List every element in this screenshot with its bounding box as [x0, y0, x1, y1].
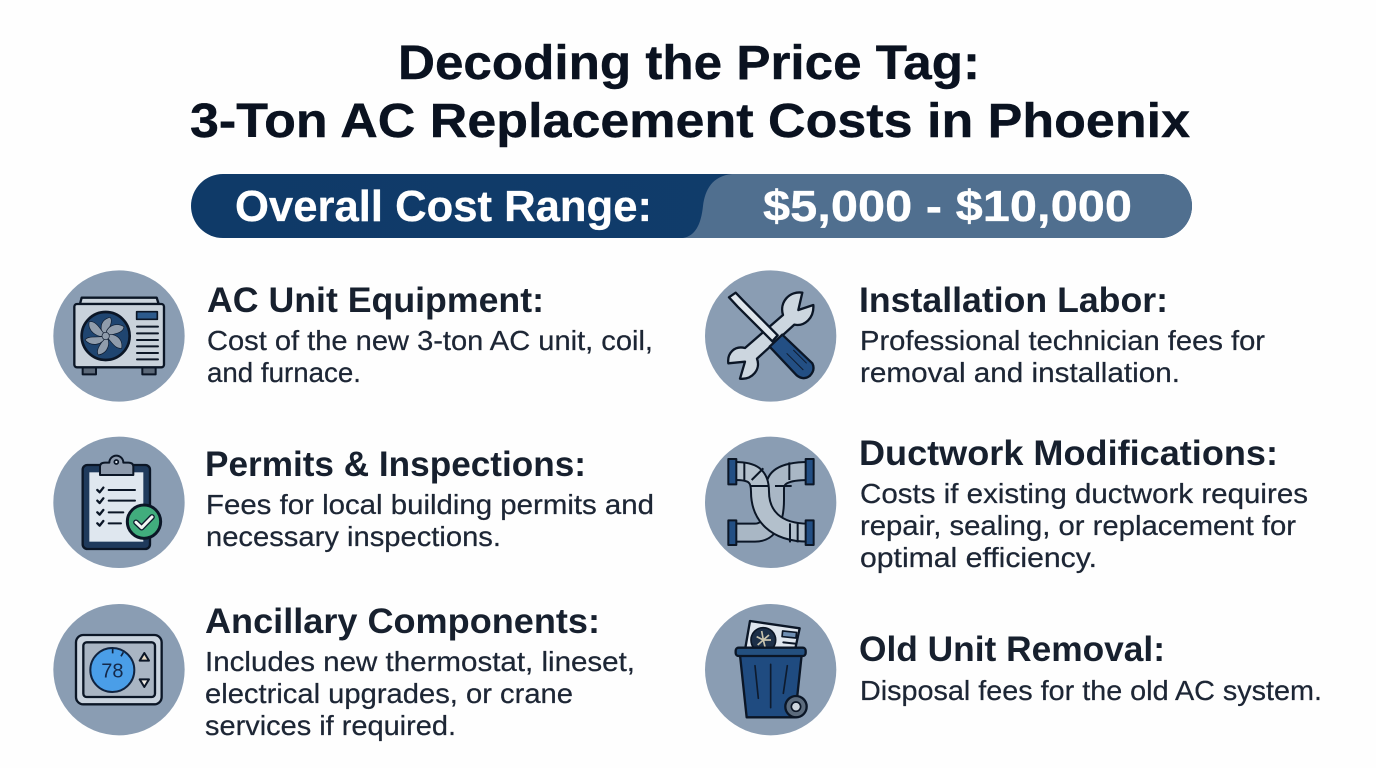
- heading: Old Unit Removal:: [859, 630, 1165, 669]
- description: [860, 325, 1265, 388]
- icon: crossed wrench and screwdriver: [705, 270, 836, 402]
- heading: Permits & Inspections:: [205, 445, 586, 484]
- description: Professional technician fees for: [860, 325, 1265, 356]
- panel: old unit removal: [705, 604, 1322, 735]
- description: [860, 478, 1308, 573]
- description: services if required.: [205, 710, 456, 741]
- icon: clipboard with check: [53, 437, 185, 568]
- overall cost range banner: [191, 174, 1192, 238]
- description: Cost of the new 3-ton AC unit, coil,: [207, 325, 653, 356]
- description: Disposal fees for the old AC system.: [860, 675, 1322, 706]
- description: Costs if existing ductwork requires: [860, 478, 1308, 509]
- heading: Ductwork Modifications:: [859, 434, 1278, 473]
- panel: ancillary components: [53, 602, 635, 741]
- icon: thermostat: [53, 604, 185, 735]
- description: optimal efficiency.: [860, 542, 1097, 573]
- heading: Installation Labor:: [859, 281, 1168, 320]
- description: [205, 646, 635, 741]
- description: electrical upgrades, or crane: [205, 678, 573, 709]
- title: Decoding the Price Tag:: [398, 37, 980, 90]
- description: removal and installation.: [860, 357, 1180, 388]
- panel: ductwork modifications: [705, 434, 1308, 573]
- title: 3-Ton AC Replacement Costs in Phoenix: [190, 95, 1190, 148]
- panel: installation labor: [705, 270, 1265, 402]
- overall cost range banner: Overall Cost Range:: [235, 182, 652, 231]
- icon: thermostat: 78: [101, 660, 123, 682]
- icon: crossed duct pipes: [705, 437, 836, 568]
- icon: AC condenser unit: [53, 270, 185, 402]
- description: and furnace.: [207, 357, 361, 388]
- description: necessary inspections.: [206, 521, 501, 552]
- icon: trash bin with old AC unit: [705, 604, 836, 735]
- description: [206, 489, 654, 552]
- description: Includes new thermostat, lineset,: [205, 646, 635, 677]
- overall cost range banner: $5,000 - $10,000: [763, 182, 1132, 231]
- panel: permits and inspections: [53, 437, 654, 568]
- panel: AC unit equipment: [53, 270, 653, 402]
- title: [190, 37, 1190, 148]
- description: repair, sealing, or replacement for: [860, 510, 1296, 541]
- heading: Ancillary Components:: [205, 602, 600, 641]
- description: [207, 325, 653, 388]
- heading: AC Unit Equipment:: [207, 281, 544, 320]
- description: Fees for local building permits and: [206, 489, 654, 520]
